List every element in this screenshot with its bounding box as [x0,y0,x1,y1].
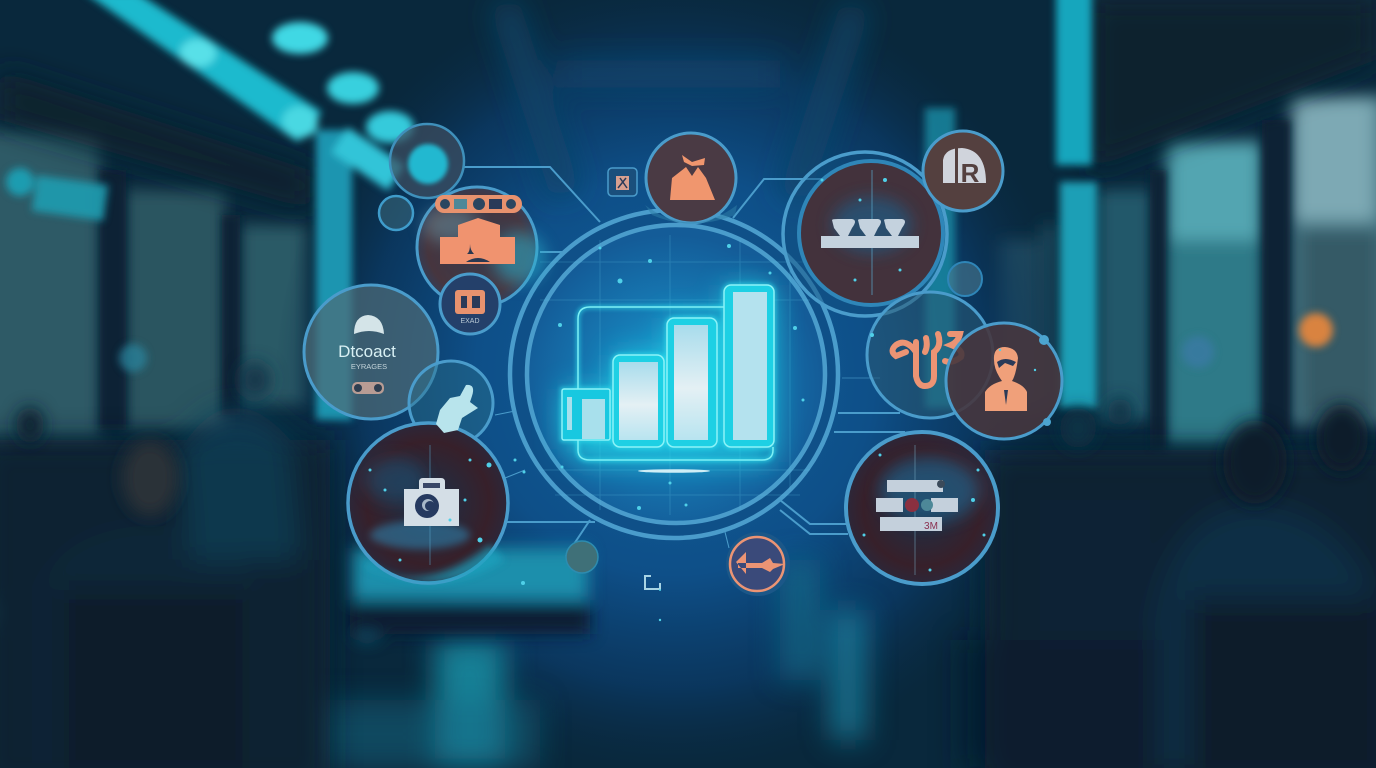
bar 1 [562,389,610,440]
icon: bracket mark [645,576,660,589]
bubble: building [417,187,546,307]
report rows: 3M [924,521,938,532]
bubble: network [867,292,993,418]
icon: IR mark: R [961,158,980,188]
bar 3 [667,318,717,447]
central analytics hub [510,210,838,538]
audience heads [16,362,1368,516]
bar chart [562,285,774,473]
hub rings [510,210,838,538]
particle speckles [368,178,1036,621]
audience silhouettes [0,407,1376,768]
icon: branching symbol [892,334,962,386]
bar 2 [613,355,664,447]
icon: presenter [985,347,1027,411]
bar 4 [724,285,774,447]
icon: control pill [435,195,522,213]
bubble: camera [348,423,508,583]
bubble: small globe [566,541,598,573]
icon: dome [354,315,384,334]
bubble: small lens [379,196,413,230]
connector lines [463,167,905,556]
chart baseline mark [638,469,710,473]
bubble: small badge: EXAD [460,318,480,325]
bubble: top-left lens [390,124,464,198]
report rows [876,480,958,532]
bubble: figure [409,361,493,445]
bubble: report cards [846,432,998,584]
sublabel: EYRAGES [351,362,387,371]
table and floor reflections [300,560,866,768]
icon: small square badge [608,168,637,196]
icon: camera [404,478,459,526]
icon: small badges [352,382,384,394]
bubble: arrow badge [726,532,790,596]
bubble: direct text [304,285,438,419]
bubble: presenter [946,323,1062,439]
icon: crouching figure [436,385,478,433]
bar chart glow [562,285,774,462]
hub grid [540,235,810,515]
chart frame [562,285,774,460]
bubble: IR logo [923,131,1003,211]
bubble: team [783,152,947,316]
icon: building [440,218,515,264]
icon: three figures [821,219,919,248]
bubble: top figure [645,133,737,224]
direct label: Dtcoact [338,342,396,361]
bubble: small orb [948,262,982,296]
bubble: small badge [440,274,500,334]
